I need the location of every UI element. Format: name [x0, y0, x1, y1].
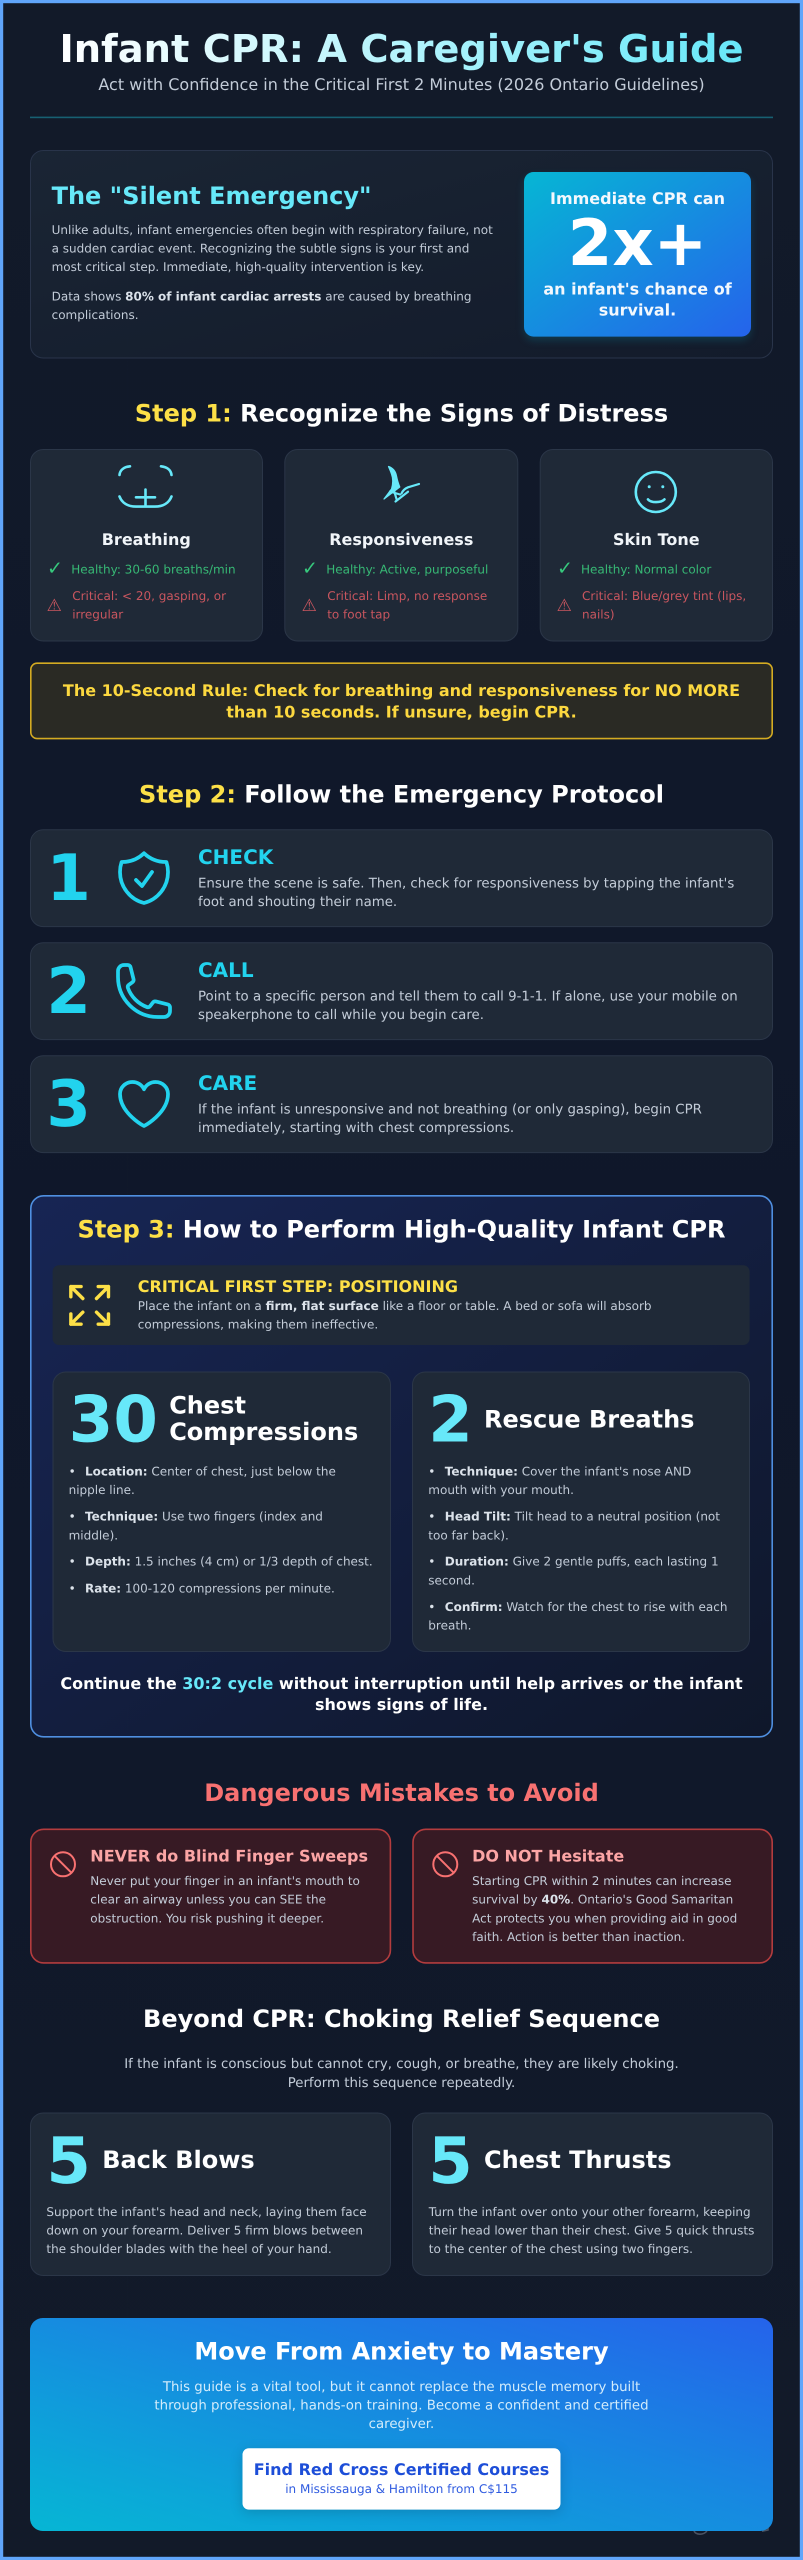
panel: breathing: [30, 450, 262, 641]
list: breaths: Technique:: [445, 1464, 518, 1478]
healthy row: [47, 558, 236, 580]
number 2: 2: [46, 955, 91, 1029]
label: skin tone: Skin Tone: [613, 530, 700, 549]
button: find courses: [242, 2448, 560, 2510]
title: Infant CPR: A Caregiver's Guide: [59, 27, 744, 72]
panel: chest thrusts: [412, 2113, 772, 2276]
list: breaths: Give 2 gentle puffs, each lasting 1: [509, 1555, 719, 1569]
critical row: [557, 589, 746, 622]
list: breaths: Tilt head to a neutral position (not: [511, 1510, 720, 1524]
cycle summary: Continue the 30:2 cycle without interruption until help arrives or the infant: [60, 1674, 743, 1693]
text block: data: Data shows 80% of infant cardiac arrests are caused by breathing: [52, 289, 472, 303]
heading: dangerous mistakes: Dangerous Mistakes to Avoid: [204, 1779, 599, 1807]
critical row: irregular: [72, 608, 123, 622]
number 1: 1: [46, 842, 91, 916]
step title: care: CARE: [198, 1071, 257, 1095]
heading: silent emergency: The "Silent Emergency": [52, 182, 372, 210]
callout: 2x survival: an infant's chance of: [543, 279, 733, 298]
icon: arrows out: [71, 1287, 108, 1324]
step text: care: If the infant is unresponsive and not breathing (or only gasping), begin CPR: [198, 1102, 702, 1117]
list: breaths: •: [428, 1600, 435, 1614]
step text: care: immediately, starting with chest compressions.: [198, 1121, 514, 1136]
list: breaths: Duration:: [445, 1555, 509, 1569]
icon: no symbol: [51, 1852, 75, 1876]
icon: no symbol: [433, 1852, 457, 1876]
critical row: ⚠: [557, 596, 572, 616]
text block: intro: a sudden cardiac event. Recognizing the subtle signs is your first and: [52, 242, 469, 256]
critical row: to foot tap: [327, 608, 390, 622]
warning title: NEVER do Blind Finger Sweeps: [90, 1847, 368, 1866]
heading: step 3: Step 3: How to Perform High-Quality Infant CPR: [78, 1215, 725, 1243]
text block: choking intro: If the infant is conscious but cannot cry, cough, or breathe, they are likely choking.: [124, 2057, 679, 2072]
list: compressions: 100-120 compressions per minute.: [121, 1581, 335, 1595]
critical row: ⚠: [302, 596, 317, 616]
healthy row: Healthy: 30-60 breaths/min: [71, 562, 236, 576]
warning title: DO NOT Hesitate: [472, 1847, 624, 1866]
title: chest thrusts: Chest Thrusts: [484, 2146, 672, 2174]
cta heading: Move From Anxiety to Mastery: [194, 2338, 609, 2366]
list: compressions: Technique:: [85, 1510, 158, 1524]
panel: check: [30, 830, 772, 927]
callout: 2x survival: [524, 172, 751, 337]
list: breaths: Head Tilt:: [445, 1510, 511, 1524]
warning text: Act protects you when providing aid in good: [472, 1911, 737, 1925]
step title: check: CHECK: [198, 845, 275, 869]
step text: call: speakerphone to call while you begin care.: [198, 1008, 484, 1023]
title: chest compressions: Compressions: [169, 1418, 358, 1446]
icon: phone: [118, 965, 170, 1017]
text: back blows: down on your forearm. Deliver 5 firm blows between: [46, 2224, 363, 2238]
list: compressions: Location:: [85, 1464, 148, 1478]
text block: data: complications.: [52, 308, 139, 322]
callout: 2x survival: survival.: [599, 301, 676, 320]
cta text: caregiver.: [369, 2417, 434, 2432]
healthy row: [557, 558, 711, 580]
list: compressions: Center of chest, just below the: [148, 1464, 336, 1478]
panel: finger sweeps: [31, 1829, 390, 1963]
text: chest thrusts: their head lower than their chest. Give 5 quick thrusts: [429, 2224, 754, 2238]
heading: step 1: Step 1: Recognize the Signs of Distress: [135, 400, 668, 428]
list: breaths: too far back).: [428, 1528, 509, 1542]
panel: silent emergency: [30, 150, 772, 358]
positioning text: compressions, making them ineffective.: [138, 1318, 378, 1332]
callout: 10-second rule: [31, 663, 772, 739]
warning text: obstruction. You risk pushing it deeper.: [90, 1911, 324, 1925]
icon: smile: [636, 472, 676, 512]
critical row: ⚠: [47, 596, 62, 616]
text block: choking intro: Perform this sequence repeatedly.: [288, 2076, 515, 2091]
critical row: Critical: Limp, no response: [327, 589, 487, 603]
text: chest thrusts: to the center of the chest using two fingers.: [429, 2242, 693, 2256]
number 5: 5: [46, 2125, 91, 2199]
callout: 2x survival: 2x+: [568, 207, 707, 281]
list: breaths: Watch for the chest to rise with each: [503, 1600, 727, 1614]
label: responsiveness: Responsiveness: [329, 530, 473, 549]
step text: check: Ensure the scene is safe. Then, check for responsiveness by tapping the infant's: [198, 876, 734, 891]
list: breaths: Confirm:: [445, 1600, 503, 1614]
warning text: faith. Action is better than inaction.: [472, 1930, 685, 1944]
critical row: Critical: Blue/grey tint (lips,: [582, 589, 746, 603]
list: breaths: second.: [428, 1573, 475, 1587]
icon: heart: [120, 1082, 168, 1126]
panel: do not hesitate: [413, 1829, 772, 1963]
cycle summary: shows signs of life.: [315, 1695, 488, 1714]
warning text: Never put your finger in an infant's mouth to: [90, 1874, 360, 1888]
number 30: 30: [69, 1384, 158, 1458]
healthy row: Healthy: Active, purposeful: [326, 562, 488, 576]
list: breaths: breath.: [428, 1619, 471, 1633]
panel: back blows: [30, 2113, 390, 2276]
number 5: 5: [428, 2125, 473, 2199]
list: compressions: •: [69, 1555, 76, 1569]
list: breaths: •: [428, 1510, 435, 1524]
panel: skin tone: [540, 450, 772, 641]
list: compressions: •: [69, 1510, 76, 1524]
warning text: survival by 40%. Ontario's Good Samaritan: [472, 1893, 733, 1907]
healthy row: ✓: [302, 558, 318, 580]
healthy row: ✓: [47, 558, 63, 580]
list: breaths: •: [428, 1464, 435, 1478]
list: compressions: Rate:: [85, 1581, 121, 1595]
step title: call: CALL: [198, 958, 254, 982]
list: compressions: Use two fingers (index and: [158, 1510, 323, 1524]
icon: responsiveness: [384, 466, 419, 502]
list: breaths: •: [428, 1555, 435, 1569]
header: [30, 27, 773, 118]
subtitle: Act with Confidence in the Critical First 2 Minutes (2026 Ontario Guidelines): [98, 75, 705, 94]
positioning title: CRITICAL FIRST STEP: POSITIONING: [138, 1277, 458, 1296]
text: back blows: Support the infant's head and neck, laying them face: [46, 2205, 367, 2219]
icon: breathing: [120, 466, 172, 507]
panel: responsiveness: [285, 450, 518, 641]
button: find courses: Find Red Cross Certified Courses: [254, 2460, 549, 2479]
step text: call: Point to a specific person and tell them to call 9-1-1. If alone, use your mobile on: [198, 989, 738, 1004]
positioning text: Place the infant on a firm, flat surface like a floor or table. A bed or sofa will absorb: [138, 1299, 652, 1313]
panel: call: [30, 943, 772, 1040]
panel: rescue breaths: [412, 1372, 750, 1652]
list: compressions: nipple line.: [69, 1483, 135, 1497]
list: breaths: mouth with your mouth.: [428, 1483, 574, 1497]
critical row: Critical: < 20, gasping, or: [72, 589, 226, 603]
callout: 10-second rule: than 10 seconds. If unsure, begin CPR.: [226, 702, 577, 721]
critical row: [47, 589, 226, 622]
text block: intro: most critical step. Immediate, high-quality intervention is key.: [52, 260, 424, 274]
panel: positioning: [53, 1265, 750, 1345]
icon: shield check: [120, 853, 168, 903]
cta text: This guide is a vital tool, but it cannot replace the muscle memory built: [162, 2380, 640, 2395]
list: breaths: Cover the infant's nose AND: [518, 1464, 691, 1478]
list: compressions: •: [69, 1581, 76, 1595]
button: find courses: in Mississauga & Hamilton from C$115: [285, 2482, 518, 2496]
list: compressions: 1.5 inches (4 cm) or 1/3 depth of chest.: [131, 1555, 373, 1569]
title: chest compressions: Chest: [169, 1391, 246, 1419]
healthy row: ✓: [557, 558, 573, 580]
number 2: 2: [428, 1384, 473, 1458]
callout: 10-second rule: The 10-Second Rule: Check for breathing and responsiveness for NO MORE: [63, 681, 740, 700]
text block: intro: Unlike adults, infant emergencies often begin with respiratory failure, not: [52, 223, 493, 237]
panel: chest compressions: [53, 1372, 390, 1652]
title: back blows: Back Blows: [102, 2146, 255, 2174]
heading: step 2: Step 2: Follow the Emergency Protocol: [139, 781, 664, 809]
label: breathing: Breathing: [102, 530, 191, 549]
title: rescue breaths: Rescue Breaths: [484, 1405, 694, 1433]
panel: call to action: [30, 2318, 773, 2531]
healthy row: Healthy: Normal color: [581, 562, 711, 576]
critical row: nails): [582, 608, 615, 622]
critical row: [302, 589, 487, 622]
warning text: clear an airway unless you can SEE the: [90, 1893, 326, 1907]
cta text: through professional, hands-on training. Become a confident and certified: [154, 2399, 649, 2414]
panel: step 3: [31, 1196, 772, 1737]
step text: check: foot and shouting their name.: [198, 895, 397, 910]
number 3: 3: [46, 1068, 91, 1142]
callout: 2x survival: Immediate CPR can: [550, 189, 725, 208]
warning text: Starting CPR within 2 minutes can increase: [472, 1874, 732, 1888]
text: back blows: the shoulder blades with the heel of your hand.: [46, 2242, 332, 2256]
healthy row: [302, 558, 488, 580]
panel: care: [30, 1056, 772, 1153]
list: compressions: middle).: [69, 1528, 118, 1542]
list: compressions: •: [69, 1464, 76, 1478]
heading: choking relief: Beyond CPR: Choking Relief Sequence: [143, 2005, 660, 2033]
text: chest thrusts: Turn the infant over onto your other forearm, keeping: [428, 2205, 751, 2219]
list: compressions: Depth:: [85, 1555, 131, 1569]
